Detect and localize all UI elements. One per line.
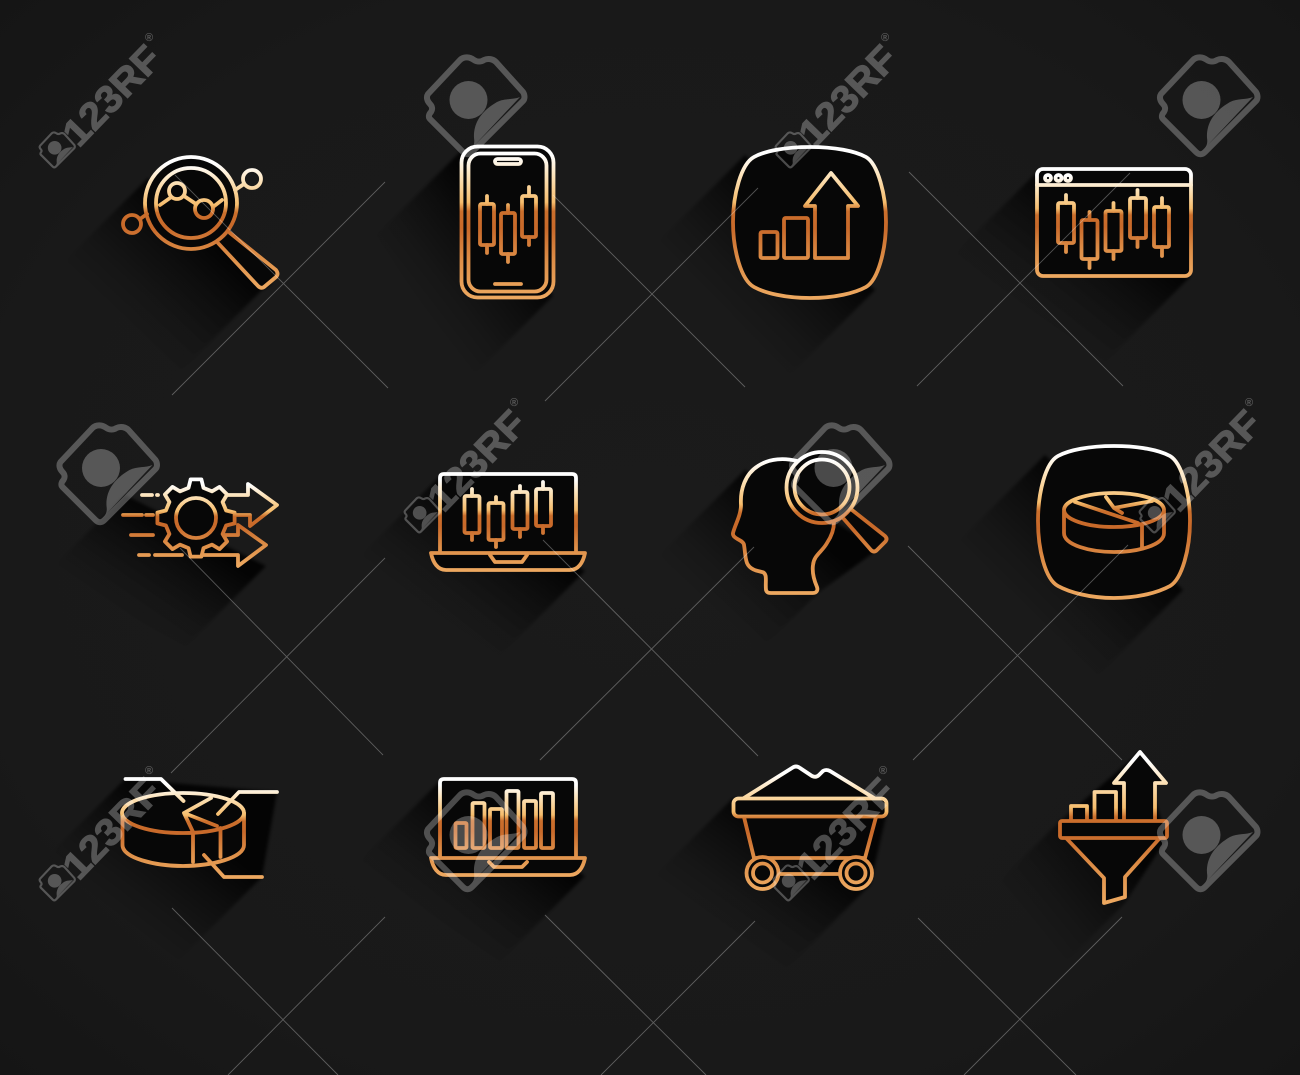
- watermark: 123RF top left: [40, 32, 170, 167]
- icon: gear with speed arrows: [123, 479, 277, 566]
- watermark: 123RF bottom left: 123RF: [55, 771, 170, 888]
- icon: 3D pie chart with callouts: [122, 779, 277, 877]
- watermark logos: large: [59, 57, 1258, 889]
- watermark: 123RF centre left: ®: [510, 397, 518, 409]
- watermark: 123RF top middle: [776, 32, 906, 167]
- icon: rounded square with pie chart: [1038, 446, 1190, 598]
- watermark: 123RF bottom middle: ®: [879, 765, 887, 777]
- thin diagonal cross lines: [171, 172, 1130, 1075]
- icon: laptop with candlestick chart: [431, 474, 585, 570]
- watermark: 123RF bottom left: [40, 765, 170, 900]
- watermark: 123RF centre left: 123RF: [420, 403, 535, 520]
- icon: magnifier with data line: [123, 157, 278, 288]
- long shadows behind icons: [40, 150, 1191, 988]
- watermark: 123RF centre right: ®: [1245, 397, 1253, 409]
- icon: rounded square with growth bars and arrow: [733, 147, 886, 298]
- icon: smartphone with candlestick chart: [462, 146, 554, 298]
- watermark: 123RF top left: ®: [145, 32, 153, 44]
- icon: browser window with candlestick chart: [1037, 169, 1191, 276]
- icon: laptop with bar chart: [431, 779, 585, 875]
- watermark: 123RF bottom left: ®: [145, 765, 153, 777]
- icon: mine cart loaded with ore: [734, 766, 886, 889]
- watermark: 123RF top middle: 123RF: [791, 38, 906, 155]
- icon: human head with magnifier: [733, 452, 886, 593]
- icon: funnel with bars and arrow: [1060, 752, 1167, 903]
- watermark: 123RF bottom middle: 123RF: [789, 771, 904, 888]
- watermark: 123RF top middle: ®: [881, 32, 889, 44]
- watermark: 123RF centre left: [405, 397, 535, 532]
- watermark: 123RF bottom middle: [774, 765, 904, 900]
- watermark: 123RF centre right: [1140, 397, 1270, 532]
- watermark: 123RF centre right: 123RF: [1155, 403, 1270, 520]
- watermark: 123RF top left: 123RF: [55, 38, 170, 155]
